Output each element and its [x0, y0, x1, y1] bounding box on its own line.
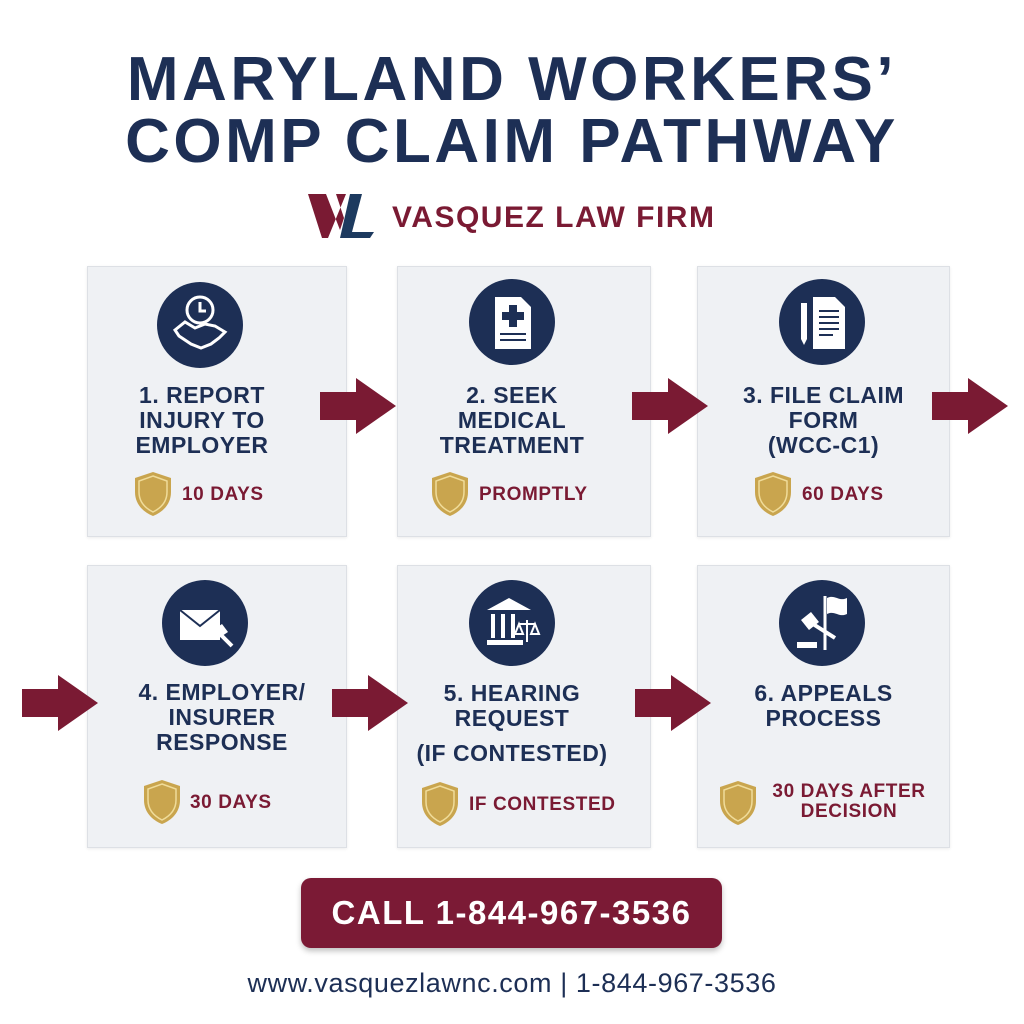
badge: step 2: PROMPTLY: [479, 484, 588, 505]
text: step 1: INJURY TO: [139, 407, 265, 433]
arrow: 2 to 3: [632, 378, 708, 434]
text: step 2: 2. SEEK: [466, 382, 558, 408]
text: step 6: PROCESS: [766, 705, 881, 731]
text: step 5: (IF CONTESTED): [416, 740, 608, 766]
badge: step 5: [422, 782, 616, 826]
text: step 2: [440, 382, 584, 458]
panel: step 6: [697, 565, 950, 848]
title: COMP CLAIM PATHWAY: [125, 107, 899, 176]
text: step 4: RESPONSE: [156, 729, 288, 755]
icon: handshake clock: [157, 282, 243, 368]
icon: claim form: [779, 279, 865, 365]
badge: step 5: IF CONTESTED: [469, 794, 616, 815]
badge: step 2: [432, 472, 588, 516]
icon: medical document: [469, 279, 555, 365]
text: step 2: MEDICAL: [458, 407, 566, 433]
text: step 4: 4. EMPLOYER/: [138, 679, 306, 705]
text: step 6: 6. APPEALS: [754, 680, 893, 706]
text: step 3: FORM: [789, 407, 858, 433]
firm name: VASQUEZ LAW FIRM: [392, 201, 715, 234]
title: [125, 45, 899, 176]
badge: step 6: 30 DAYS AFTER: [772, 781, 926, 802]
text: step 3: 3. FILE CLAIM: [743, 382, 904, 408]
text: step 6: [754, 680, 893, 731]
logo mark: [308, 194, 374, 238]
panel: step 2: [397, 266, 651, 537]
text: step 1: 1. REPORT: [139, 382, 265, 408]
badge: step 1: [135, 472, 264, 516]
text: step 4: [138, 679, 306, 755]
icon: gavel flag: [779, 580, 865, 666]
arrow: 3 to 4: [932, 378, 1008, 434]
text: step 1: [135, 382, 269, 458]
footer contact: www.vasquezlawnc.com | 1-844-967-3536: [248, 968, 776, 998]
arrow: into 4: [22, 675, 98, 731]
icon: courthouse scales: [469, 580, 555, 666]
text: step 1: EMPLOYER: [135, 432, 269, 458]
badge: step 6: DECISION: [801, 801, 897, 822]
title: MARYLAND WORKERS’: [127, 45, 897, 114]
panel: step 4: [87, 565, 347, 848]
badge: step 3: 60 DAYS: [802, 484, 884, 505]
badge: step 3: [755, 472, 884, 516]
panel: step 1: [87, 266, 347, 537]
arrow: 1 to 2: [320, 378, 396, 434]
badge: step 4: 30 DAYS: [190, 792, 272, 813]
text: step 5: REQUEST: [455, 705, 569, 731]
CTA button: CALL 1-844-967-3536: [332, 894, 691, 931]
badge: step 1: 10 DAYS: [182, 484, 264, 505]
text: step 2: TREATMENT: [440, 432, 584, 458]
panel: step 3: [697, 266, 950, 537]
arrow: 5 to 6: [635, 675, 711, 731]
text: step 4: INSURER: [168, 704, 276, 730]
arrow: 4 to 5: [332, 675, 408, 731]
logo: [308, 194, 715, 238]
badge: step 6: [720, 781, 926, 825]
text: step 5: [416, 680, 608, 766]
CTA button: [301, 878, 722, 948]
icon: envelope gavel: [162, 580, 248, 666]
panel: step 5: [397, 565, 651, 848]
text: step 3: [743, 382, 904, 458]
text: step 5: 5. HEARING: [444, 680, 580, 706]
badge: step 4: [144, 780, 272, 824]
text: step 3: (WCC-C1): [768, 432, 879, 458]
